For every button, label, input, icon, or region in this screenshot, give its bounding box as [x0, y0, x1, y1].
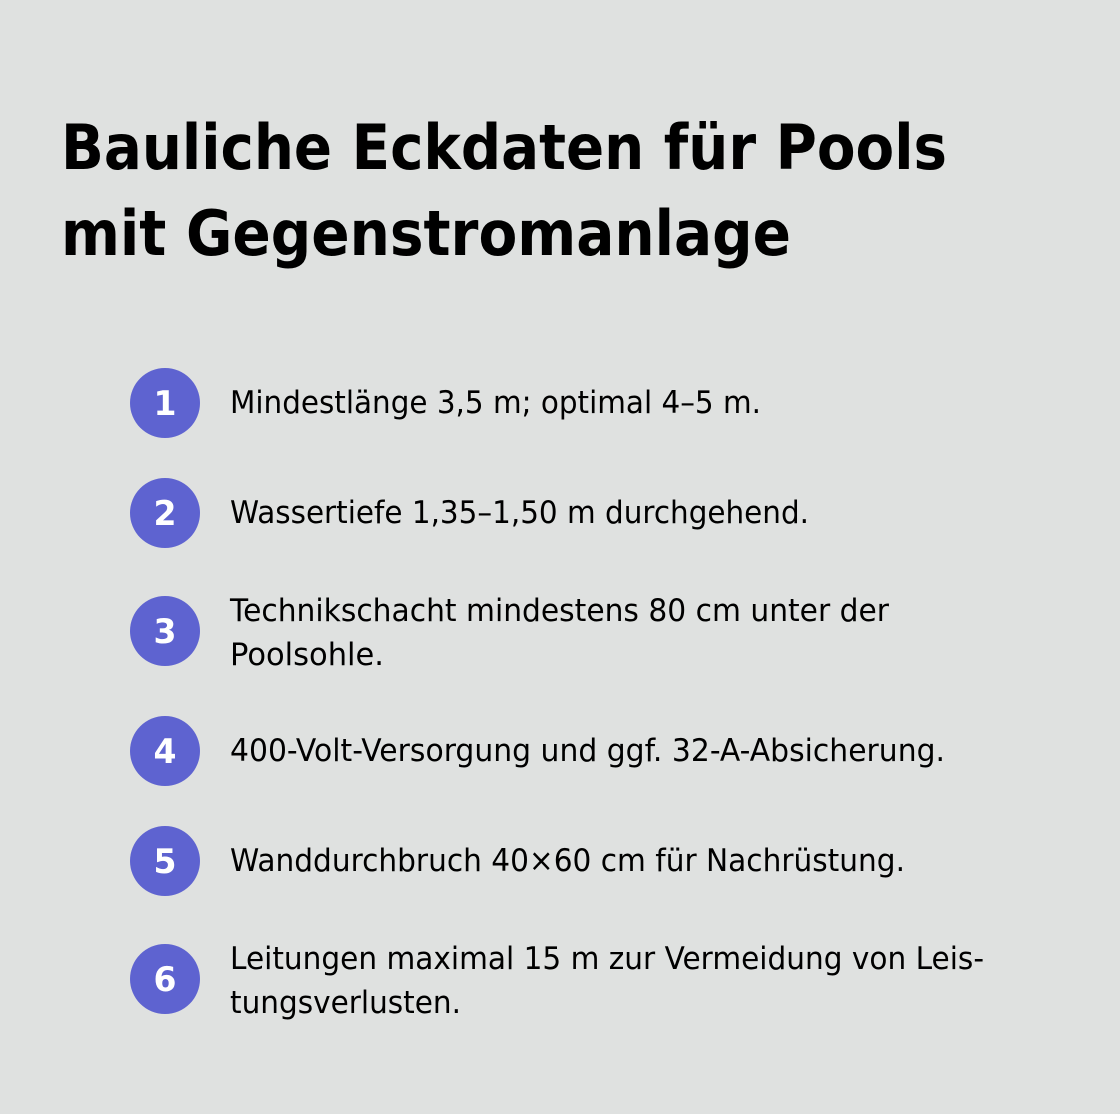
badge 3: [130, 596, 200, 666]
item 3: [130, 593, 889, 673]
badge 4: 4: [154, 732, 176, 772]
badge 6: [130, 944, 200, 1014]
badge 5: 5: [154, 842, 176, 882]
badge 5: [130, 826, 200, 896]
item 4: [130, 716, 945, 786]
badge 6: 6: [154, 960, 176, 1000]
badge 3: 3: [154, 612, 176, 652]
text 3: [229, 593, 889, 673]
text 4: 400-Volt-Versorgung und ggf. 32-A-Absicherung.: [230, 733, 945, 769]
text 1: Mindestlänge 3,5 m; optimal 4–5 m.: [230, 385, 761, 421]
item 5: [130, 826, 905, 896]
item 6: [130, 941, 984, 1021]
badge 2: [130, 478, 200, 548]
badge 1: 1: [154, 384, 176, 424]
title: Bauliche Eckdaten für Pools: [61, 111, 947, 184]
text 6: Leitungen maximal 15 m zur Vermeidung von Leis-: [230, 941, 984, 977]
badge 2: 2: [154, 494, 176, 534]
text 6: tungsverlusten.: [230, 985, 461, 1021]
item 1: [130, 368, 761, 438]
text 2: Wassertiefe 1,35–1,50 m durchgehend.: [230, 495, 809, 531]
badge 1: [130, 368, 200, 438]
text 3: Poolsohle.: [230, 637, 384, 673]
badge 4: [130, 716, 200, 786]
item 2: [130, 478, 809, 548]
title: mit Gegenstromanlage: [61, 197, 791, 270]
text 3: Technikschacht mindestens 80 cm unter der: [229, 593, 889, 629]
title: [61, 111, 947, 270]
text 6: [230, 941, 984, 1021]
text 5: Wanddurchbruch 40×60 cm für Nachrüstung.: [230, 843, 905, 879]
